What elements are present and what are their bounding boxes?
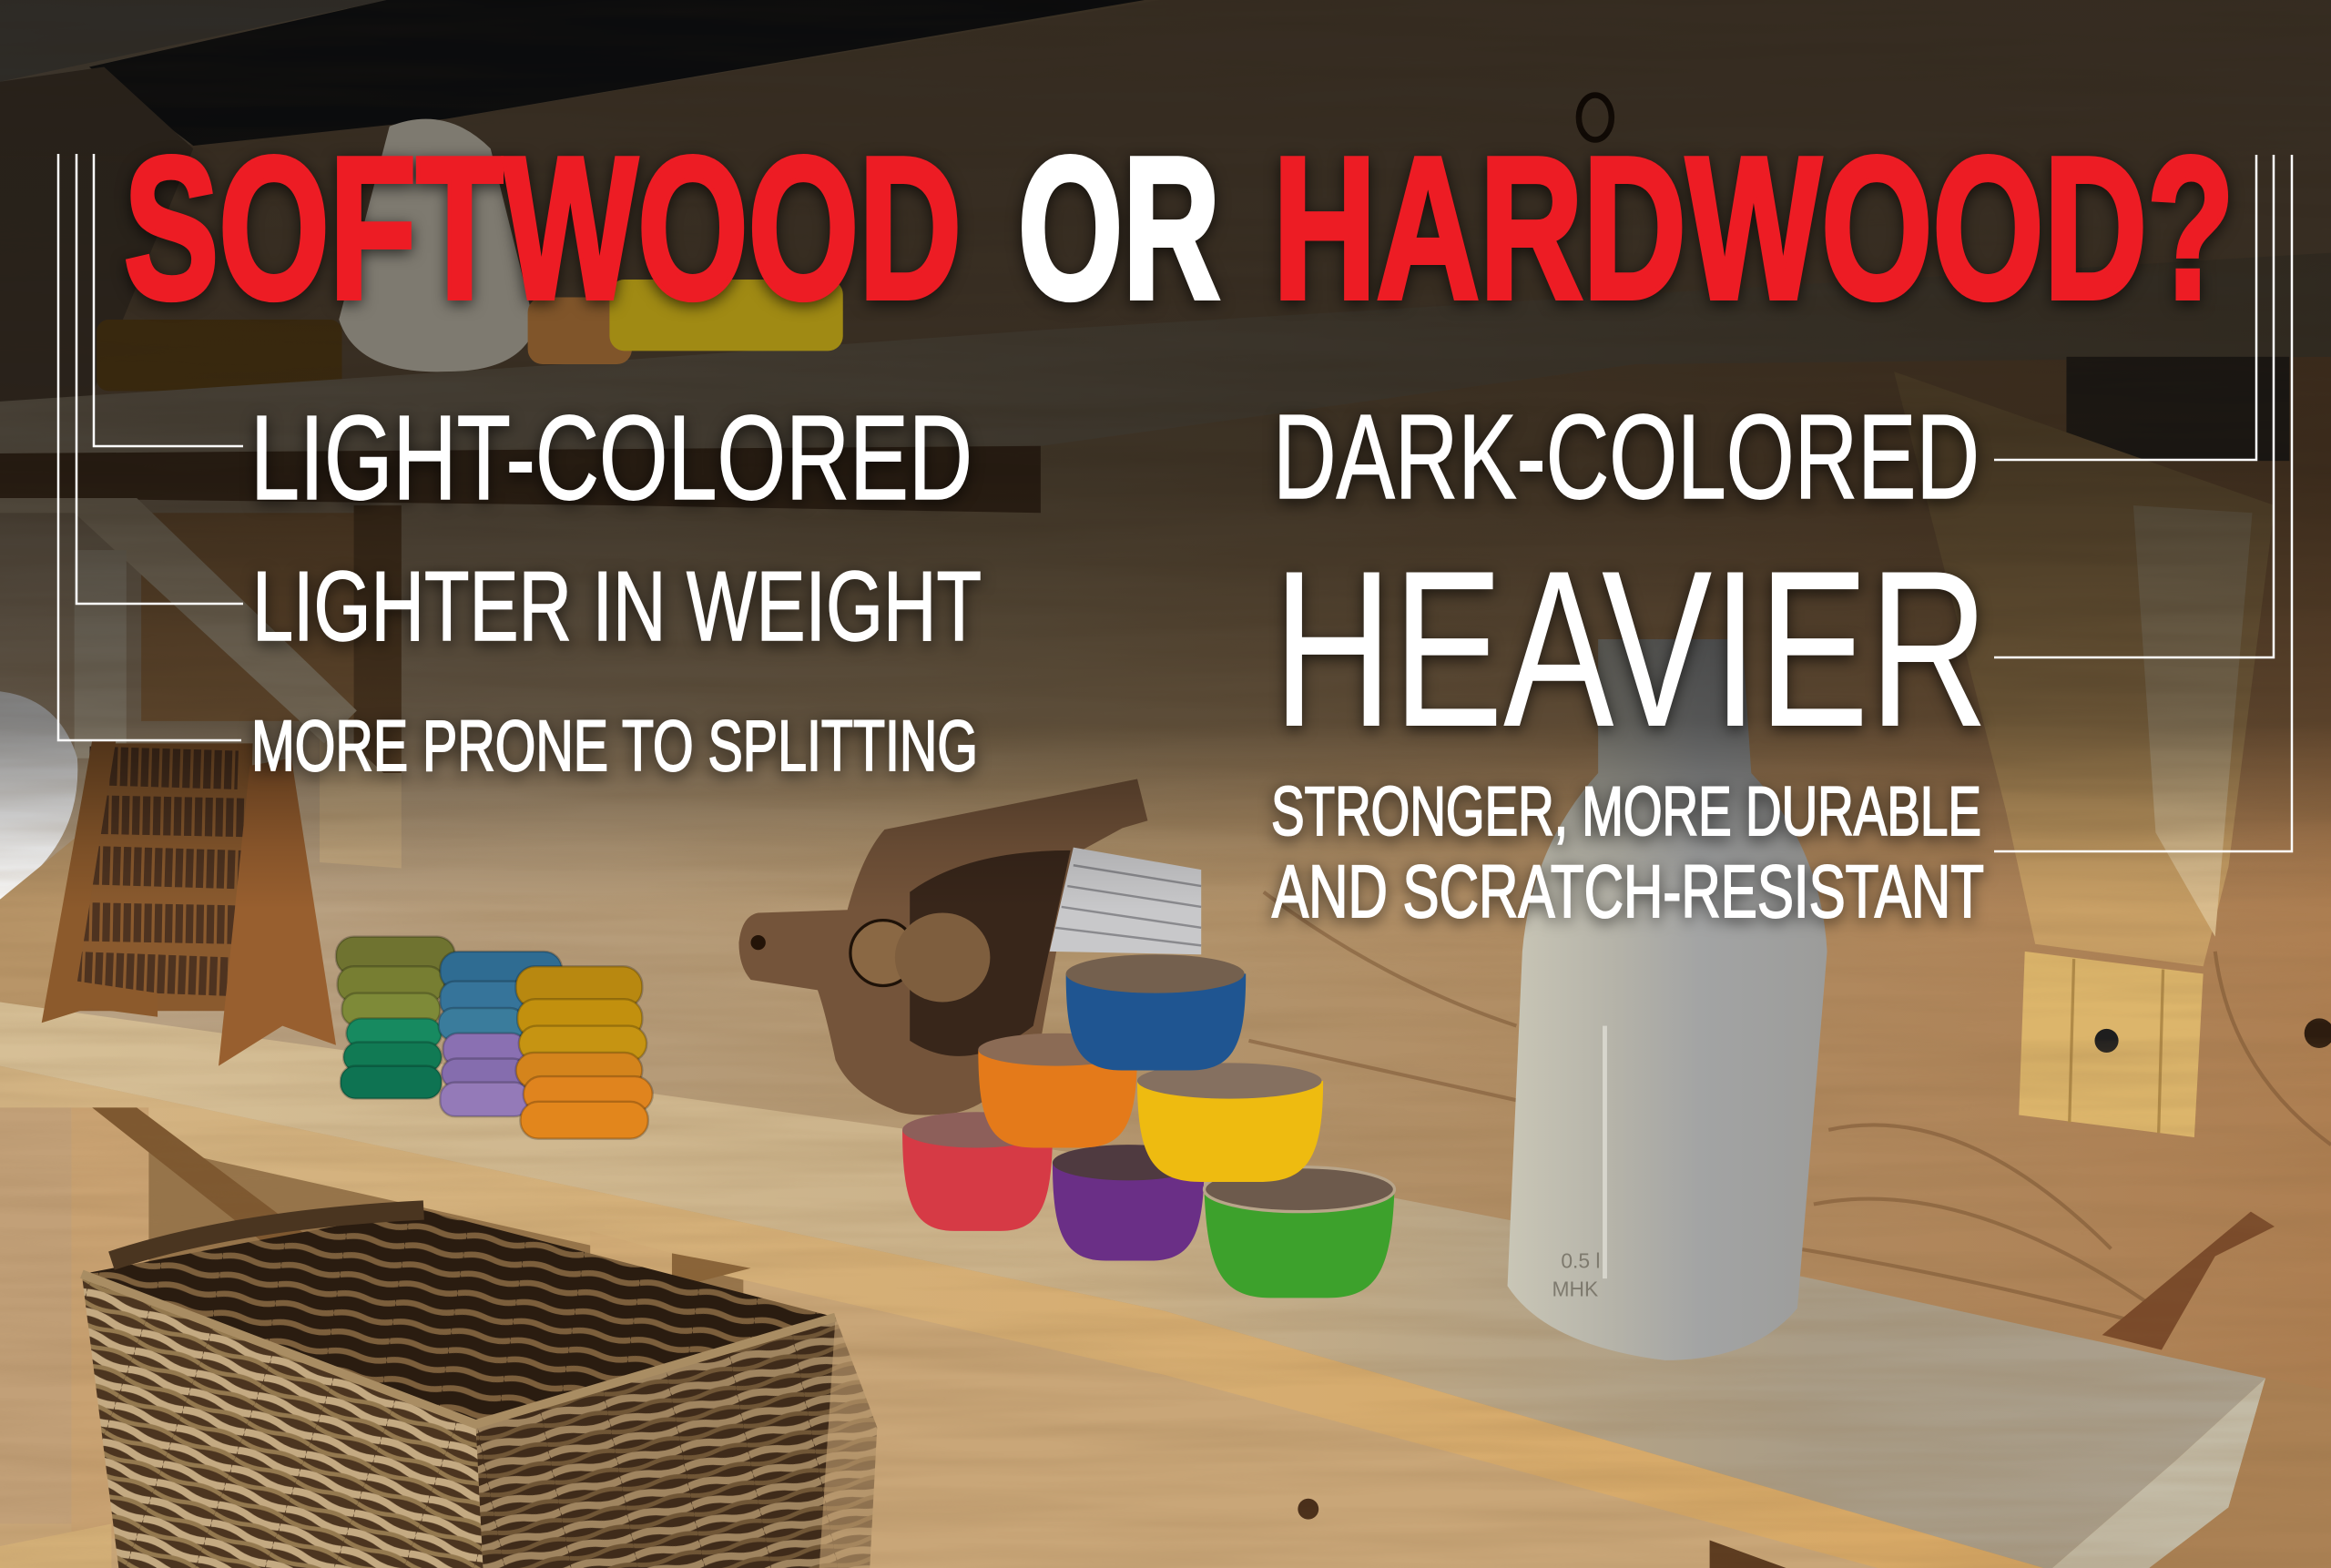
purple bowl bbox=[1053, 1145, 1204, 1261]
bottle embossed text bbox=[1552, 1249, 1601, 1301]
blue bowl bbox=[1066, 954, 1246, 1071]
upper back panel bbox=[0, 0, 2331, 431]
basket right face bbox=[475, 1318, 836, 1568]
diagonal brace bbox=[0, 498, 357, 743]
cleat shadow bbox=[672, 1253, 751, 1288]
ochre shelf item bbox=[97, 320, 342, 391]
softwood traits: MORE PRONE TO SPLITTING bbox=[251, 705, 978, 786]
connector lines: hardwood bbox=[1994, 155, 2292, 851]
shelf underside shadow bbox=[0, 446, 1041, 513]
bead rows bbox=[75, 766, 245, 977]
title: SOFTWOOD bbox=[124, 116, 962, 341]
dark corrugated roof bbox=[89, 0, 1145, 146]
green bowl bbox=[1204, 1167, 1394, 1298]
softwood traits bbox=[250, 391, 982, 786]
light strip bbox=[2133, 505, 2253, 937]
dimmed upper shelf items bbox=[339, 119, 843, 372]
figure right lobe bbox=[895, 912, 990, 1002]
post bbox=[71, 1107, 148, 1539]
title bbox=[124, 116, 2234, 341]
bottle highlight bbox=[1603, 1026, 1607, 1278]
wall grain curves bbox=[1248, 892, 2331, 1323]
floor board bbox=[0, 1524, 111, 1568]
cut-out bbox=[910, 850, 1071, 1056]
orange stack bbox=[516, 966, 653, 1139]
basket handle bbox=[111, 1210, 423, 1261]
window light bbox=[0, 691, 77, 900]
right knot bbox=[2305, 1018, 2331, 1048]
screw bbox=[2094, 1029, 2119, 1053]
dark gap bbox=[1710, 1540, 1791, 1568]
bristle lines bbox=[1055, 865, 1201, 945]
main shelf front face bbox=[0, 1066, 2050, 1568]
basket rim bbox=[82, 1274, 836, 1424]
abacus front frame bbox=[219, 759, 336, 1066]
diagonal block bbox=[1894, 372, 2275, 966]
board bbox=[738, 779, 1147, 1115]
bracket post bbox=[141, 513, 357, 721]
hardwood traits bbox=[1271, 390, 1989, 933]
yellow bowl bbox=[1137, 1063, 1323, 1182]
wall right bottom bbox=[2147, 1379, 2331, 1568]
red bowl bbox=[902, 1112, 1053, 1231]
foot grooves bbox=[2070, 959, 2163, 1133]
white jar bbox=[339, 119, 535, 372]
abacus back frame bbox=[42, 740, 158, 1023]
under-shelf shade bbox=[148, 1107, 743, 1338]
cleat bbox=[590, 1231, 672, 1288]
bottle embossed text: 0.5 l bbox=[1561, 1249, 1601, 1273]
hole bbox=[751, 935, 766, 950]
coin stacks bbox=[336, 937, 653, 1139]
brace bbox=[92, 1107, 334, 1264]
main shelf end face bbox=[2050, 1379, 2265, 1568]
blue and purple stack bbox=[439, 952, 562, 1116]
ceiling beam bbox=[0, 0, 387, 82]
bottle embossed text: MHK bbox=[1552, 1278, 1598, 1301]
knot streak bbox=[2102, 1212, 2275, 1349]
bracket foot bbox=[2019, 952, 2204, 1137]
post edge bbox=[354, 505, 402, 773]
main shelf top bbox=[0, 1002, 2265, 1568]
figure left lobe bbox=[850, 921, 916, 985]
lower wall bbox=[0, 1093, 1918, 1568]
left bracket bbox=[0, 498, 402, 868]
left upper wall bbox=[0, 66, 193, 409]
connector lines: softwood bbox=[58, 154, 243, 740]
title: OR bbox=[1018, 116, 1220, 341]
basket left face bbox=[82, 1274, 484, 1568]
orange item bbox=[528, 298, 632, 364]
under-shelf bracket bbox=[0, 1107, 751, 1568]
abacus backing bbox=[52, 743, 253, 1011]
wooden board toy bbox=[738, 779, 1147, 1115]
hardwood traits: AND SCRATCH-RESISTANT bbox=[1272, 850, 1984, 933]
orange bowl bbox=[978, 1033, 1137, 1147]
hardwood traits: STRONGER, MORE DURABLE bbox=[1271, 773, 1981, 850]
green stack bbox=[336, 937, 455, 1099]
bottle bbox=[1508, 639, 1827, 1360]
yellow block bbox=[609, 280, 843, 351]
left wall lower bbox=[0, 832, 82, 1011]
hardwood traits: DARK-COLORED bbox=[1273, 390, 1980, 524]
left planks bbox=[0, 1107, 71, 1524]
basket shadow bbox=[819, 1318, 877, 1568]
softwood traits: LIGHTER IN WEIGHT bbox=[252, 551, 982, 662]
knot bbox=[1579, 95, 1612, 139]
hardwood traits: HEAVIER bbox=[1273, 524, 1989, 773]
abacus bbox=[42, 740, 336, 1066]
brush bristles bbox=[1050, 848, 1201, 954]
lower tab bbox=[320, 714, 402, 868]
knot lower bbox=[1298, 1499, 1318, 1520]
right bracket bbox=[1894, 372, 2275, 1137]
upper shelf board bbox=[0, 253, 2331, 453]
softwood traits: LIGHT-COLORED bbox=[250, 391, 972, 524]
left upright bbox=[75, 550, 127, 759]
basket bbox=[82, 1210, 877, 1568]
right upper panel bbox=[2066, 357, 2289, 461]
basket interior bbox=[82, 1210, 836, 1424]
